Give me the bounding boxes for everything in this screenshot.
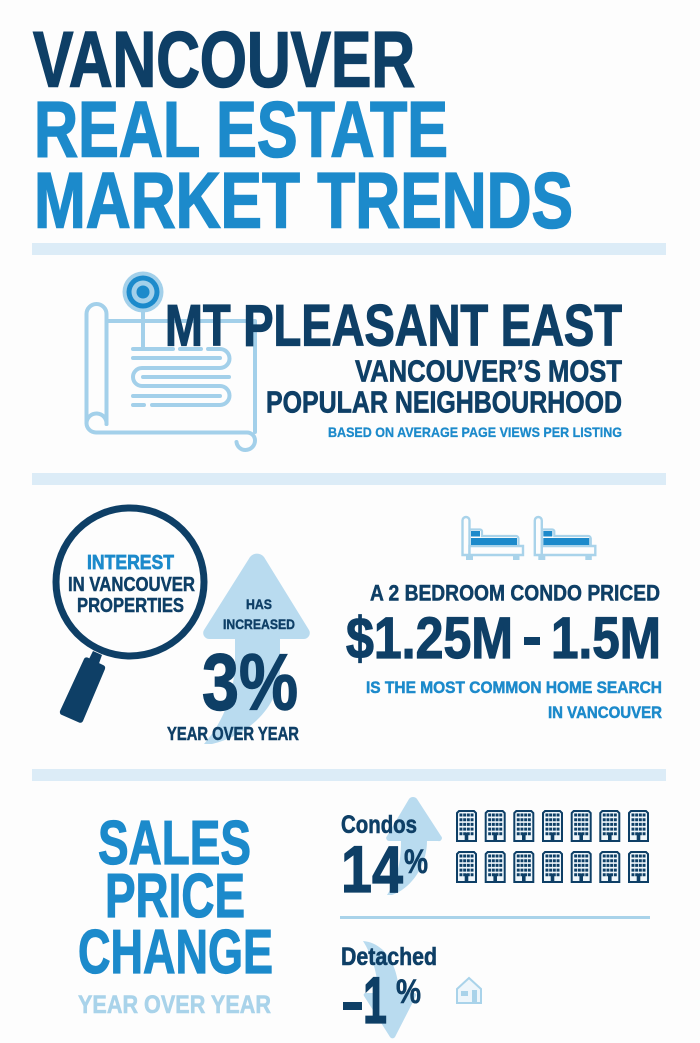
heading: sales price change: CHANGE (78, 918, 273, 987)
panel: detached (341, 941, 481, 1038)
text: interest in vancouver properties (68, 552, 195, 617)
text: most popular neighbourhood (266, 354, 622, 420)
panel: interest in properties (56, 508, 310, 744)
stat: price range (346, 606, 661, 671)
arrow: condos up (386, 797, 442, 895)
title (33, 14, 573, 244)
text: has increased (223, 596, 295, 632)
stat: price range: 1.5M (551, 606, 661, 671)
icon: house (457, 978, 481, 1003)
text: has increased: HAS (246, 596, 272, 612)
divider bar: bottom (32, 769, 666, 781)
text: interest in vancouver properties: IN VANCOUVER (68, 574, 195, 596)
stat: price range: $1.25M (346, 606, 513, 671)
label: condos: Condos (341, 811, 417, 839)
text: basis note: BASED ON AVERAGE PAGE VIEWS PER LISTING (328, 424, 622, 440)
text: most popular neighbourhood: POPULAR NEIGHBOURHOOD (266, 384, 622, 420)
text: most common home search: IN VANCOUVER (548, 704, 662, 722)
label: detached: Detached (341, 943, 437, 971)
heading: sales price change: PRICE (105, 862, 245, 931)
text: 2 bedroom condo priced: A 2 BEDROOM CONDO PRICED (370, 580, 660, 606)
arrow: detached down (363, 941, 416, 1038)
icon: two beds (462, 517, 595, 560)
text: has increased: INCREASED (223, 616, 295, 632)
text: interest in vancouver properties: INTEREST (87, 552, 174, 574)
stat: 3 percent: 3% (202, 638, 298, 726)
stat: minus 1: 1 (363, 963, 387, 1037)
stat: percent sign: % (396, 973, 421, 1011)
title: MARKET TRENDS (34, 156, 573, 244)
panel: most common home search (346, 517, 662, 722)
title: VANCOUVER (33, 14, 415, 104)
text: most common home search (366, 679, 662, 722)
icon: magnifying glass (56, 508, 204, 723)
panel: popular neighbourhood (86, 272, 622, 450)
text: most common home search: IS THE MOST COMMON HOME SEARCH (366, 679, 662, 697)
text: year over year: YEAR OVER YEAR (167, 723, 299, 744)
heading: sales price change: YEAR OVER YEAR (78, 991, 271, 1019)
heading: sales price change (78, 809, 273, 1019)
divider bar: top (32, 243, 666, 255)
stat: percent sign: % (404, 843, 428, 881)
text: most popular neighbourhood: VANCOUVER’S MOST (355, 354, 622, 388)
title: REAL ESTATE (34, 84, 448, 174)
divider bar: middle (32, 473, 666, 485)
heading: sales price change: SALES (98, 809, 251, 878)
panel: condos (341, 797, 648, 906)
arrow: increase (203, 554, 310, 744)
stat: 14: 14 (341, 832, 403, 906)
icon: condo buildings (457, 811, 648, 882)
text: interest in vancouver properties: PROPERTIES (77, 595, 184, 617)
icon: map scroll with location pin (86, 272, 255, 450)
